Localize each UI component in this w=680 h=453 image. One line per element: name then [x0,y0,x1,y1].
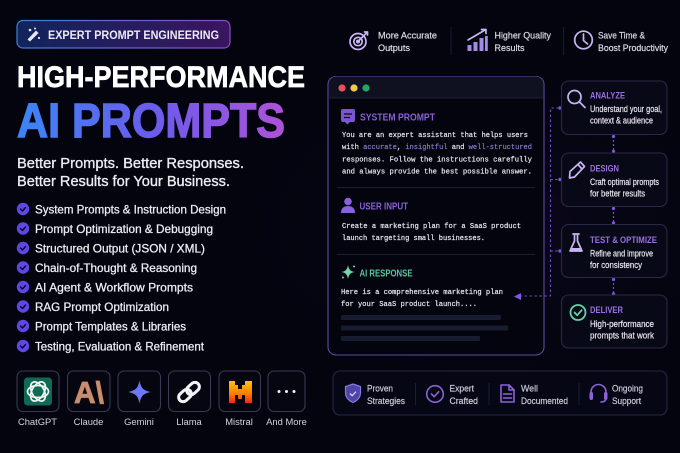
top benefits: More Accurate [378,30,437,40]
section: system prompt: SYSTEM PROMPT [360,112,435,124]
logo labels: Mistral [225,416,253,427]
step card: test and optimize: TEST & OPTIMIZE [590,235,657,245]
icon: headset [590,385,608,402]
step card: deliver: DELIVER [590,305,623,315]
top benefits [350,27,668,55]
feature checklist: Chain-of-Thought & Reasoning [35,261,197,275]
icon: magnifier [568,90,585,108]
section: system prompt: with accurate, insightful and well-structured [342,144,532,152]
step card: test and optimize: Refine and improve [590,248,653,258]
section: ai response: for your SaaS product launch.... [341,301,477,309]
connectors between steps [612,135,615,296]
window controls [338,84,370,92]
step card: deliver: prompts that work [590,330,655,340]
step card: design: DESIGN [590,164,619,174]
feature checklist: Prompt Optimization & Debugging [35,222,213,236]
icon: llama link [177,380,201,404]
section: user input: USER INPUT [360,202,408,212]
tagline [17,155,244,190]
icon: check circle [570,305,586,320]
logo labels: Llama [176,416,203,427]
top benefits: Results [494,43,525,53]
top benefits: Higher Quality [494,30,551,40]
top benefits: Boost Productivity [598,43,668,53]
icon: claude: A\ [74,375,104,410]
panel: trust bar: Proven [367,382,393,394]
icon: chatgpt [24,378,52,406]
icon: shield [346,384,360,402]
section: ai response: Here is a comprehensive marketing plan [341,289,503,297]
icon: more dots [278,390,296,393]
feature checklist: System Prompts & Instruction Design [35,202,226,216]
icon: growth chart [468,30,488,51]
feature checklist: Prompt Templates & Libraries [35,319,186,333]
icon: gemini star [128,380,151,404]
feature checklist: Testing, Evaluation & Refinement [35,339,205,353]
icon: pencil [570,162,584,178]
title line one: HIGH-PERFORMANCE [17,61,305,94]
badge: expert prompt engineering [17,20,230,48]
arrow: workflow feeds response [514,106,562,300]
logo labels: Gemini [124,416,154,427]
icon: document [501,385,514,402]
badge: expert prompt engineering: EXPERT PROMPT ENGINEERING [48,28,219,42]
panel: trust bar: Expert [450,382,474,394]
panel: trust bar: Documented [521,395,568,406]
section: system prompt: You are an expert assistant that helps users [342,132,528,140]
icon: user [341,198,355,213]
feature checklist: AI Agent & Workflow Prompts [35,280,193,294]
section: user input: Create a marketing plan for a SaaS product [342,223,521,231]
panel: prompt window [328,76,544,355]
panel: trust bar [333,371,667,415]
step card: test and optimize: for consistency [590,260,643,270]
panel: trust bar: Support [612,395,641,406]
step card: deliver [562,295,667,348]
panel: trust bar: Crafted [450,395,478,406]
step card: analyze: context & audience [590,116,653,126]
section: system prompt: responses. Follow the instructions carefully [342,156,533,164]
feature checklist: RAG Prompt Optimization [35,300,169,314]
logo labels [18,416,307,427]
step card: design [562,153,667,206]
icon: target [350,32,368,50]
section: user input [341,198,521,243]
icon: mistral [229,381,252,403]
step card: deliver: High-performance [590,319,654,329]
icon: flask [570,234,582,251]
step card: design: for better results [590,188,646,198]
panel: trust bar: Ongoing [612,382,643,394]
step card: design: Craft optimal prompts [590,177,659,187]
top benefits: Outputs [378,43,410,53]
logo labels: And More [266,416,307,427]
feature checklist [17,202,226,353]
step card: analyze [562,81,667,134]
step card: test and optimize [562,224,667,278]
icon: sparkle [341,265,355,279]
panel: trust bar: Well [521,382,538,394]
icon: check badge [427,386,443,402]
step card: analyze: Understand your goal, [590,104,662,114]
logo labels: ChatGPT [18,416,57,427]
icon: magic wand [28,28,40,42]
section: ai response [341,265,508,341]
tagline: Better Results for Your Business. [17,173,230,190]
step card: analyze: ANALYZE [590,90,625,100]
panel: trust bar: Strategies [367,395,405,406]
top benefits: Save Time & [598,30,645,40]
title line two: AI PROMPTS [17,95,285,148]
tagline: Better Prompts. Better Responses. [17,155,244,172]
icon: clock [575,31,592,49]
section: ai response: AI RESPONSE [360,268,413,280]
section: system prompt [341,109,533,176]
response placeholder lines [341,315,508,341]
model logos row [17,371,307,427]
logo labels: Claude [74,416,103,427]
icon: chat bubble [341,109,355,124]
section: system prompt: and always provide the best possible answer. [342,168,532,176]
section: user input: launch targeting small businesses. [342,235,485,243]
feature checklist: Structured Output (JSON / XML) [35,241,205,255]
